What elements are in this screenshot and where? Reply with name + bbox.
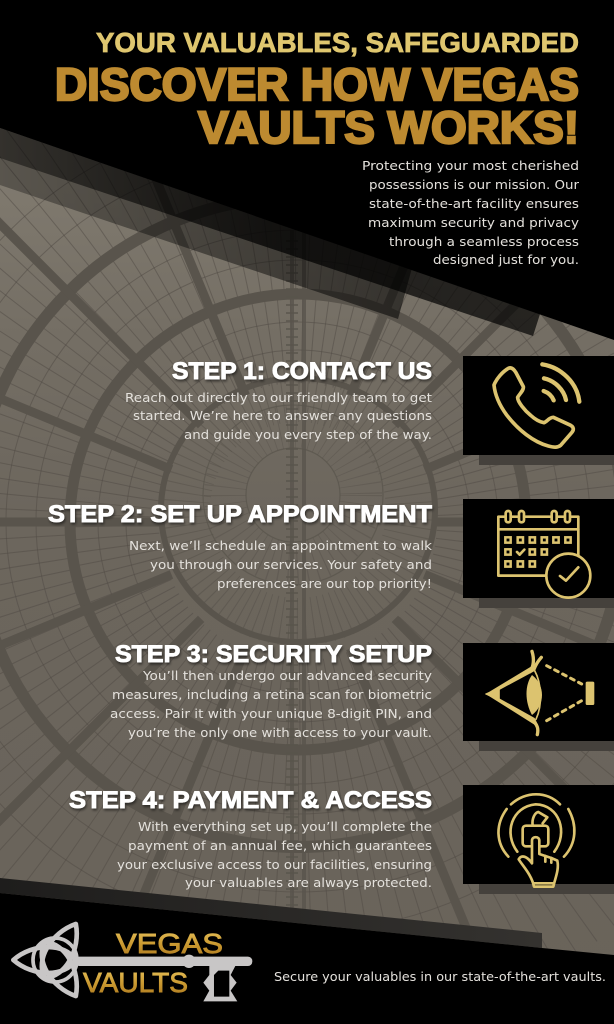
intro text: possessions is our mission. Our <box>369 177 580 192</box>
icon box 2: calendar <box>463 499 614 608</box>
intro text: through a seamless process <box>389 234 579 249</box>
step 1 text: Reach out directly to our friendly team to get <box>125 390 432 405</box>
step 3 text <box>110 668 433 740</box>
icon box 4: lock with pointing hand <box>463 785 614 894</box>
step 4 heading: STEP 4: PAYMENT & ACCESS <box>69 787 432 814</box>
step 3 text: You’ll then undergo our advanced security <box>142 668 433 683</box>
logo wordmark <box>83 928 223 998</box>
top black diagonal panel <box>0 0 614 340</box>
step 2 heading: STEP 2: SET UP APPOINTMENT <box>48 501 432 528</box>
step 4 text <box>117 819 432 890</box>
logo wordmark: VEGAS <box>116 928 223 959</box>
logo: Vegas Vaults key <box>13 917 252 1003</box>
intro text: Protecting your most cherished <box>362 158 579 173</box>
step 3 text: you’re the only one with access to your vault. <box>128 725 432 740</box>
step 1 text: started. We’re here to answer any questions <box>133 408 432 423</box>
intro text: state-of-the-art facility ensures <box>369 196 579 211</box>
key graphic <box>13 917 252 1003</box>
step 3 heading: STEP 3: SECURITY SETUP <box>115 641 432 668</box>
step 4 text: your valuables are always protected. <box>185 875 432 890</box>
step 3 text: measures, including a retina scan for biometric <box>112 687 432 702</box>
footer tagline: Secure your valuables in our state-of-the-art vaults. <box>274 969 606 984</box>
intro text: maximum security and privacy <box>368 215 580 230</box>
intro text <box>362 158 580 267</box>
title: DISCOVER HOW VEGAS <box>55 59 579 110</box>
icon box 1: phone <box>463 356 614 465</box>
step 1 heading: STEP 1: CONTACT US <box>172 358 432 385</box>
step 4 text: payment of an annual fee, which guarantees <box>128 838 432 853</box>
step 1 text: and guide you every step of the way. <box>184 427 432 442</box>
step 4 text: With everything set up, you’ll complete the <box>138 819 432 834</box>
title: VAULTS WORKS! <box>198 102 579 153</box>
bottom black diagonal panel <box>0 878 614 1024</box>
step 2 text: you through our services. Your safety and <box>150 557 432 572</box>
step 3 text: access. Pair it with your unique 8-digit PIN, and <box>110 706 432 721</box>
step 1 text <box>125 390 432 442</box>
title <box>55 27 579 153</box>
step 2 text <box>129 538 433 591</box>
icon box 3: retina scan eye <box>463 643 614 751</box>
step 2 text: Next, we’ll schedule an appointment to walk <box>129 538 433 553</box>
intro text: designed just for you. <box>433 252 579 267</box>
logo wordmark: VAULTS <box>83 967 188 998</box>
step 4 text: your exclusive access to our facilities, ensuring <box>117 857 432 872</box>
step 2 text: preferences are our top priority! <box>217 576 432 591</box>
title: YOUR VALUABLES, SAFEGUARDED <box>96 27 579 58</box>
